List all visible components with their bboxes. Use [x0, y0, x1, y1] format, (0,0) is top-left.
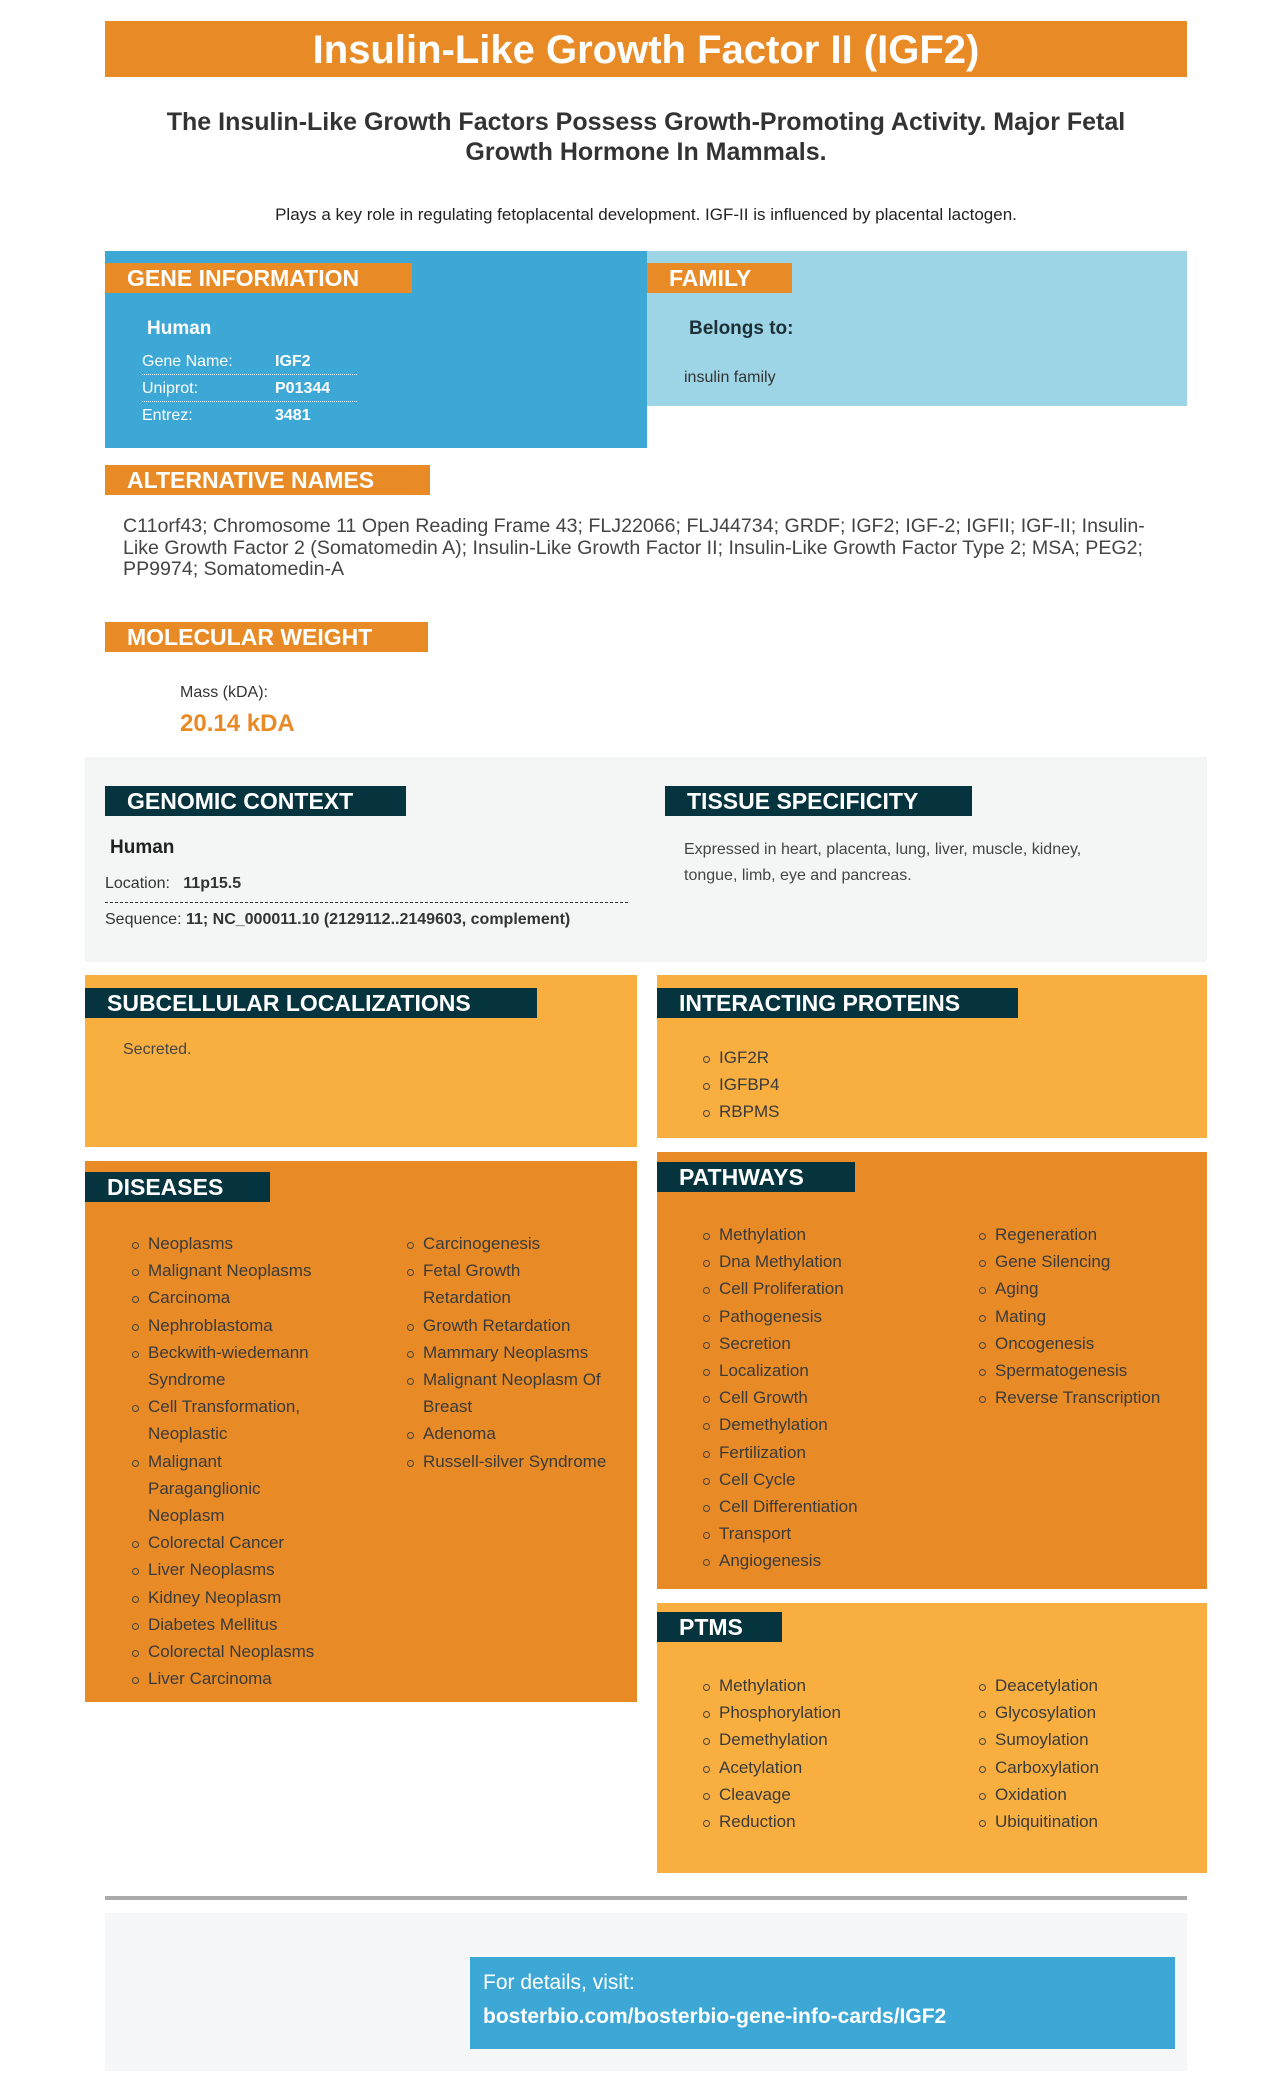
ptms list col2: Sumoylation [995, 1730, 1089, 1749]
diseases list col2: Russell-silver Syndrome [423, 1452, 606, 1471]
panel: interacting proteins [657, 975, 1207, 1138]
genomic text: Location: 11p15.5 [105, 875, 241, 892]
pathways list col2: Spermatogenesis [995, 1361, 1127, 1380]
callout: details link: For details, visit: [483, 1971, 635, 1994]
pathways list col1: Angiogenesis [719, 1551, 821, 1570]
pathways list col2: Oncogenesis [995, 1334, 1094, 1353]
pathways list col1: Cell Cycle [719, 1470, 796, 1489]
pathways list col1: Pathogenesis [719, 1307, 822, 1326]
ptms list col2 [979, 1676, 1099, 1831]
pathways list col2 [979, 1225, 1160, 1407]
heading: molecular weight [105, 622, 428, 652]
genomic text: Sequence: 11; NC_000011.10 (2129112..2149603, complement) [105, 911, 570, 928]
pathways list col2: Reverse Transcription [995, 1388, 1160, 1407]
interacting list: IGF2R [719, 1048, 769, 1067]
gene info table: IGF2 [275, 353, 311, 370]
pathways list col1: Fertilization [719, 1443, 806, 1462]
heading: tissue specificity: TISSUE SPECIFICITY [687, 788, 918, 814]
molecular weight value [180, 684, 295, 737]
subtitle: The Insulin-Like Growth Factors Possess Growth-Promoting Activity. Major Fetal Growth Hormone In Mammals. [167, 108, 1125, 166]
tissue text: Expressed in heart, placenta, lung, liver, muscle, kidney, tongue, limb, eye and pancreas. [684, 841, 1081, 884]
title [105, 21, 1187, 77]
heading: subcellular: SUBCELLULAR LOCALIZATIONS [107, 990, 471, 1016]
panel: family [647, 251, 1187, 406]
heading: ptms [657, 1612, 782, 1642]
heading: molecular weight: MOLECULAR WEIGHT [127, 624, 372, 650]
diseases list col1: Kidney Neoplasm [148, 1588, 281, 1607]
gene info table [142, 318, 357, 424]
panel: family: insulin family [684, 369, 776, 386]
family text: Belongs to: [689, 318, 794, 339]
pathways list col1: Cell Differentiation [719, 1497, 858, 1516]
diseases list col2 [407, 1234, 606, 1471]
pathways list col2: Gene Silencing [995, 1252, 1110, 1271]
diseases list col1: Beckwith-wiedemann Syndrome [148, 1343, 309, 1389]
callout: details link: bosterbio.com/bosterbio-gene-info-cards/IGF2 [483, 2005, 946, 2028]
interacting list: IGFBP4 [719, 1075, 779, 1094]
panel: subcellular localizations [85, 975, 637, 1147]
heading: interacting proteins [657, 988, 1018, 1018]
ptms list col1: Acetylation [719, 1758, 802, 1777]
gene info table: Human [147, 318, 211, 339]
interacting list [703, 1048, 779, 1121]
ptms list col2: Ubiquitination [995, 1812, 1098, 1831]
gene info table: Uniprot: [142, 380, 198, 397]
heading: interacting proteins: INTERACTING PROTEINS [679, 990, 960, 1016]
heading: gene information [105, 263, 412, 293]
title: Insulin-Like Growth Factor II (IGF2) [313, 28, 979, 72]
pathways list col2: Aging [995, 1279, 1038, 1298]
ptms list col1: Cleavage [719, 1785, 791, 1804]
pathways list col1: Dna Methylation [719, 1252, 842, 1271]
heading: ptms: PTMS [679, 1614, 743, 1640]
heading: pathways [657, 1162, 855, 1192]
interacting list: RBPMS [719, 1102, 779, 1121]
callout: details link [470, 1957, 1175, 2049]
pathways list col1: Transport [719, 1524, 791, 1543]
ptms list col1: Reduction [719, 1812, 796, 1831]
diseases list col1: Diabetes Mellitus [148, 1615, 277, 1634]
panel: diseases [85, 1161, 637, 1702]
molecular weight value: 20.14 kDA [180, 710, 295, 737]
ptms list col1: Demethylation [719, 1730, 828, 1749]
ptms list col2: Glycosylation [995, 1703, 1096, 1722]
heading: genomic context: GENOMIC CONTEXT [127, 788, 353, 814]
diseases list col1: Nephroblastoma [148, 1316, 273, 1335]
footer panel [105, 1913, 1187, 2071]
panel: pathways [657, 1152, 1207, 1589]
pathways list col1: Localization [719, 1361, 809, 1380]
molecular weight value: Mass (kDA): [180, 684, 268, 701]
diseases list col1: Cell Transformation, Neoplastic [148, 1397, 300, 1443]
heading: gene information: GENE INFORMATION [127, 265, 359, 291]
pathways list col2: Mating [995, 1307, 1046, 1326]
diseases list col1: Malignant Neoplasms [148, 1261, 311, 1280]
panel: ptms [657, 1603, 1207, 1873]
diseases list col1: Liver Neoplasms [148, 1560, 275, 1579]
heading: diseases [85, 1172, 270, 1202]
alternative names text: C11orf43; Chromosome 11 Open Reading Frame 43; FLJ22066; FLJ44734; GRDF; IGF2; IGF-2; IGFII; IGF-II; Insulin-Like Growth Factor 2 (Somatomedin A); Insulin-Like Growth Factor II; Insulin-Like Growth Factor Type 2; MSA; PEG2; PP9974; Somatomedin-A [123, 515, 1145, 580]
diseases list col2: Mammary Neoplasms [423, 1343, 588, 1362]
pathways list col1: Methylation [719, 1225, 806, 1244]
diseases list col2: Malignant Neoplasm Of Breast [423, 1370, 601, 1416]
pathways list col1: Cell Growth [719, 1388, 808, 1407]
gene info table: P01344 [275, 380, 330, 397]
gene info table: Entrez: [142, 407, 193, 424]
pathways list col1: Secretion [719, 1334, 791, 1353]
pathways list col1 [703, 1225, 858, 1570]
ptms list col2: Deacetylation [995, 1676, 1098, 1695]
genomic text [105, 837, 628, 928]
genomic text: Human [110, 837, 174, 858]
gene info table: 3481 [275, 407, 311, 424]
diseases list col1: Neoplasms [148, 1234, 233, 1253]
pathways list col1: Cell Proliferation [719, 1279, 844, 1298]
diseases list col2: Adenoma [423, 1424, 496, 1443]
diseases list col1: Colorectal Neoplasms [148, 1642, 314, 1661]
heading: family: FAMILY [669, 265, 751, 291]
ptms list col2: Carboxylation [995, 1758, 1099, 1777]
heading: subcellular [85, 988, 537, 1018]
description: Plays a key role in regulating fetoplacental development. IGF-II is influenced by placental lactogen. [275, 205, 1017, 224]
ptms list col1 [703, 1676, 841, 1831]
panel: gene information [105, 251, 647, 448]
pathways list col1: Demethylation [719, 1415, 828, 1434]
heading: family [647, 263, 792, 293]
heading: pathways: PATHWAYS [679, 1164, 804, 1190]
pathways list col2: Regeneration [995, 1225, 1097, 1244]
ptms list col1: Phosphorylation [719, 1703, 841, 1722]
subcellular text: Secreted. [123, 1041, 191, 1058]
heading: alternative names [105, 465, 430, 495]
diseases list col2: Carcinogenesis [423, 1234, 540, 1253]
gene info table: Gene Name: [142, 353, 233, 370]
diseases list col2: Growth Retardation [423, 1316, 570, 1335]
diseases list col1: Colorectal Cancer [148, 1533, 284, 1552]
panel: genomic context & tissue [85, 757, 1207, 962]
diseases list col1: Carcinoma [148, 1288, 230, 1307]
diseases list col1 [132, 1234, 314, 1688]
heading: diseases: DISEASES [107, 1174, 223, 1200]
diseases list col1: Malignant Paraganglionic Neoplasm [148, 1452, 260, 1525]
ptms list col1: Methylation [719, 1676, 806, 1695]
heading: genomic context [105, 786, 406, 816]
diseases list col1: Liver Carcinoma [148, 1669, 272, 1688]
ptms list col2: Oxidation [995, 1785, 1067, 1804]
heading: tissue specificity [665, 786, 972, 816]
diseases list col2: Fetal Growth Retardation [423, 1261, 520, 1307]
heading: alternative names: ALTERNATIVE NAMES [127, 467, 374, 493]
